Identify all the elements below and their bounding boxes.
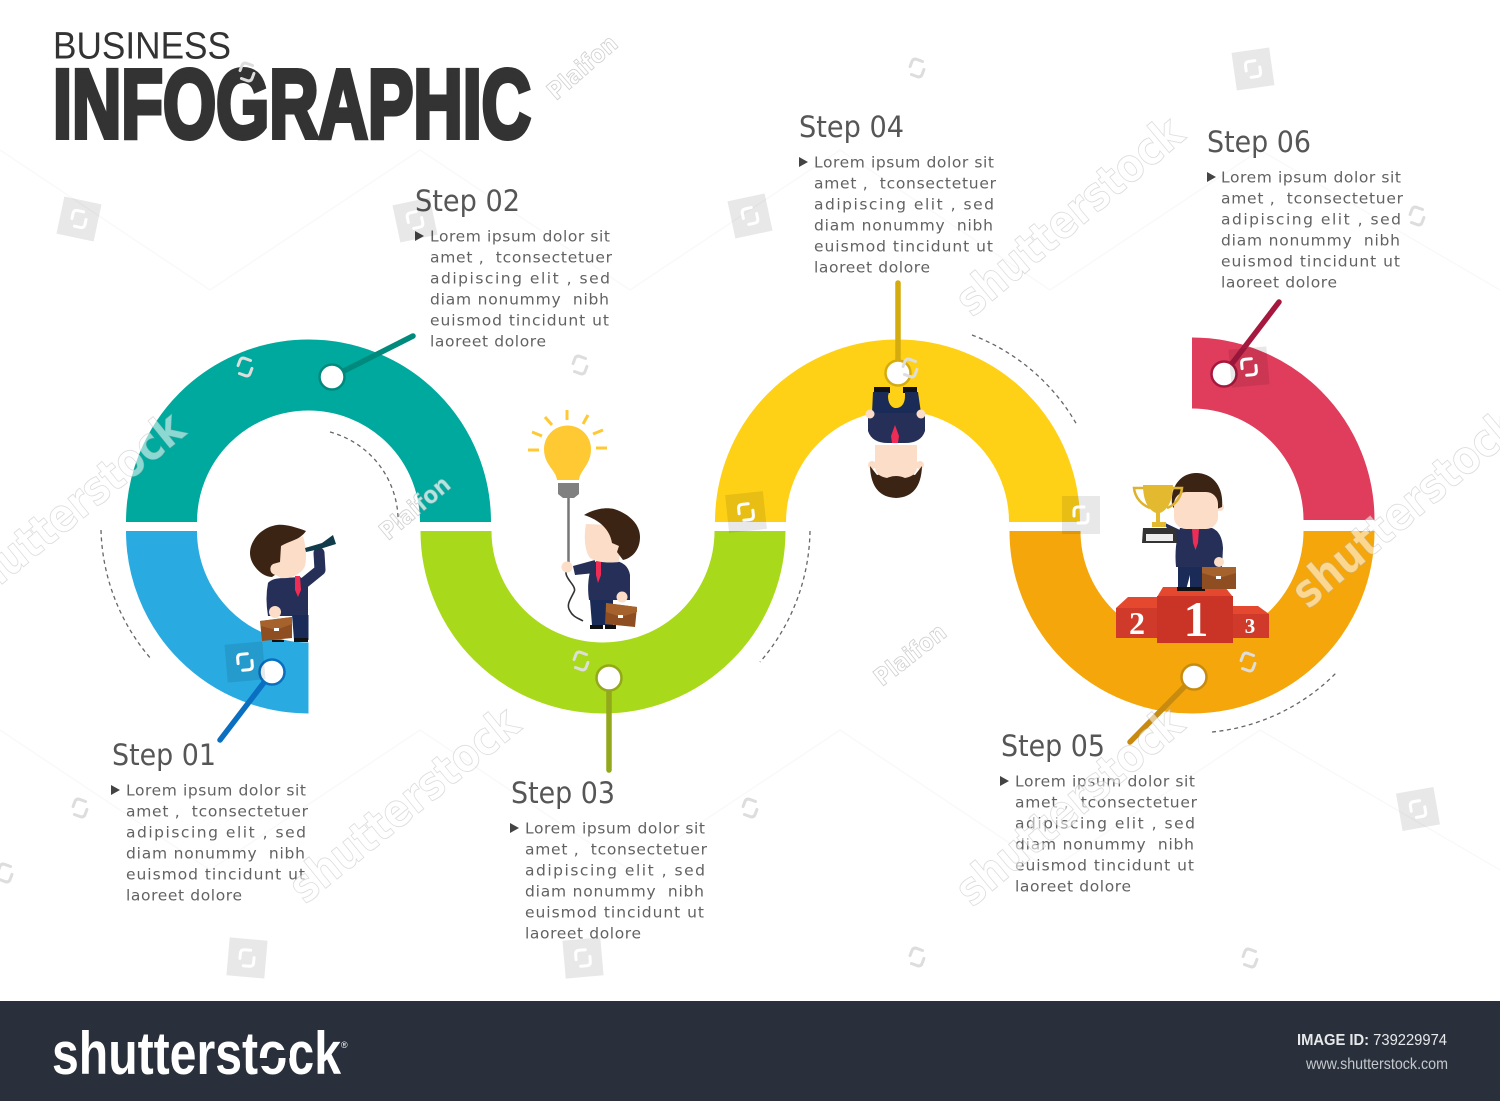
body copy: diam nonummy nibh xyxy=(1221,232,1400,250)
body copy: diam nonummy nibh xyxy=(814,217,993,235)
heading: Step 04 xyxy=(799,110,904,144)
body copy: Lorem ipsum dolor sit xyxy=(1015,773,1195,791)
character: upside-down businessman xyxy=(866,387,926,498)
character: businessman holding light bulb xyxy=(528,410,640,629)
podium: 1 xyxy=(1184,591,1208,647)
body copy: adipiscing elit , sed xyxy=(1015,815,1195,833)
text block: step 01 xyxy=(111,738,309,905)
icon: light bulb xyxy=(528,410,607,621)
arrow bullet xyxy=(1207,172,1216,182)
body copy: diam nonummy nibh xyxy=(525,883,704,901)
body copy: adipiscing elit , sed xyxy=(126,824,306,842)
watermark overlay: shutterstock xyxy=(944,104,1194,326)
body copy: euismod tincidunt ut xyxy=(126,866,305,884)
heading: Step 06 xyxy=(1207,125,1311,159)
body copy: diam nonummy nibh xyxy=(430,291,609,309)
character: businessman with trophy on podium xyxy=(1116,473,1269,647)
body copy: amet , tconsectetuer xyxy=(814,175,997,193)
pin: step 03 xyxy=(596,666,622,770)
watermark overlay: shutterstock xyxy=(944,694,1194,916)
body copy xyxy=(126,782,309,905)
text block: step 03 xyxy=(510,776,708,943)
image id: IMAGE ID: 739229974 xyxy=(1297,1032,1447,1049)
body copy: laoreet dolore xyxy=(525,925,641,943)
pin: step 06 xyxy=(1212,302,1279,386)
arc: step 02 teal xyxy=(162,375,456,522)
pin: step 04 xyxy=(886,283,910,386)
podium xyxy=(1116,587,1269,647)
heading: Step 02 xyxy=(415,184,520,218)
body copy: diam nonummy nibh xyxy=(126,845,305,863)
body copy xyxy=(525,820,708,943)
site url: www.shutterstock.com xyxy=(1305,1056,1448,1073)
arc: step 05 orange xyxy=(1045,531,1339,678)
body copy xyxy=(1015,773,1198,896)
watermark overlay: Plaifon xyxy=(868,618,952,692)
briefcase xyxy=(260,617,292,641)
body copy: adipiscing elit , sed xyxy=(525,862,705,880)
footer bar xyxy=(0,1001,1500,1101)
heading: Step 05 xyxy=(1001,729,1105,763)
title line: BUSINESS: BUSINESS xyxy=(53,26,231,68)
watermark overlay: Plaifon xyxy=(542,29,623,106)
body copy xyxy=(1221,169,1404,292)
pin: step 01 xyxy=(220,660,284,740)
arrow bullet xyxy=(510,823,519,833)
text block: step 06 xyxy=(1207,125,1404,292)
body copy: amet , tconsectetuer xyxy=(430,249,613,267)
body copy: euismod tincidunt ut xyxy=(1015,857,1194,875)
body copy: laoreet dolore xyxy=(814,259,930,277)
body copy: amet , tconsectetuer xyxy=(1221,190,1404,208)
body copy: adipiscing elit , sed xyxy=(1221,211,1401,229)
body copy: Lorem ipsum dolor sit xyxy=(814,154,994,172)
title xyxy=(53,26,531,158)
heading: Step 01 xyxy=(112,738,216,772)
body copy: amet , tconsectetuer xyxy=(1015,794,1198,812)
footer logo: shutterstock xyxy=(52,1020,342,1087)
body copy: laoreet dolore xyxy=(1221,274,1337,292)
body copy: euismod tincidunt ut xyxy=(814,238,993,256)
arrow bullet xyxy=(415,231,424,241)
watermark overlay: shutterstock xyxy=(278,695,530,914)
arc: step 06 red xyxy=(1192,373,1339,520)
body copy: euismod tincidunt ut xyxy=(525,904,704,922)
title line: INFOGRAPHIC: INFOGRAPHIC xyxy=(53,50,531,158)
text block: step 02 xyxy=(415,184,613,351)
arc: step 01 blue xyxy=(162,531,308,678)
body copy: Lorem ipsum dolor sit xyxy=(126,782,306,800)
arrow bullet xyxy=(799,157,808,167)
body copy: Lorem ipsum dolor sit xyxy=(1221,169,1401,187)
arrow bullet xyxy=(111,785,120,795)
body copy xyxy=(430,228,613,351)
text block: step 04 xyxy=(799,110,997,277)
icon: trophy xyxy=(1134,485,1182,543)
registered mark: ® xyxy=(341,1040,348,1050)
body copy xyxy=(814,154,997,277)
text block: step 05 xyxy=(1000,729,1198,896)
arc: step 03 green xyxy=(456,531,750,678)
body copy: Lorem ipsum dolor sit xyxy=(525,820,705,838)
dashed guide arcs xyxy=(101,335,1337,732)
arrow bullet xyxy=(1000,776,1009,786)
winding road of coloured arcs xyxy=(162,373,1339,678)
body copy: diam nonummy nibh xyxy=(1015,836,1194,854)
heading: Step 03 xyxy=(511,776,615,810)
character: businessman with telescope xyxy=(250,525,336,642)
body copy: adipiscing elit , sed xyxy=(814,196,994,214)
body copy: euismod tincidunt ut xyxy=(430,312,609,330)
podium: 2 xyxy=(1129,605,1145,641)
body copy: adipiscing elit , sed xyxy=(430,270,610,288)
briefcase xyxy=(1202,567,1236,589)
body copy: amet , tconsectetuer xyxy=(525,841,708,859)
body copy: amet , tconsectetuer xyxy=(126,803,309,821)
pin: step 02 xyxy=(320,336,413,390)
watermark overlay: Plaifon xyxy=(374,470,456,546)
body copy: laoreet dolore xyxy=(126,887,242,905)
arc: step 04 yellow xyxy=(750,375,1044,522)
podium: 3 xyxy=(1245,614,1255,638)
pin: step 05 xyxy=(1130,664,1206,742)
body copy: laoreet dolore xyxy=(1015,878,1131,896)
body copy: laoreet dolore xyxy=(430,333,546,351)
body copy: Lorem ipsum dolor sit xyxy=(430,228,610,246)
body copy: euismod tincidunt ut xyxy=(1221,253,1400,271)
briefcase xyxy=(605,603,637,627)
